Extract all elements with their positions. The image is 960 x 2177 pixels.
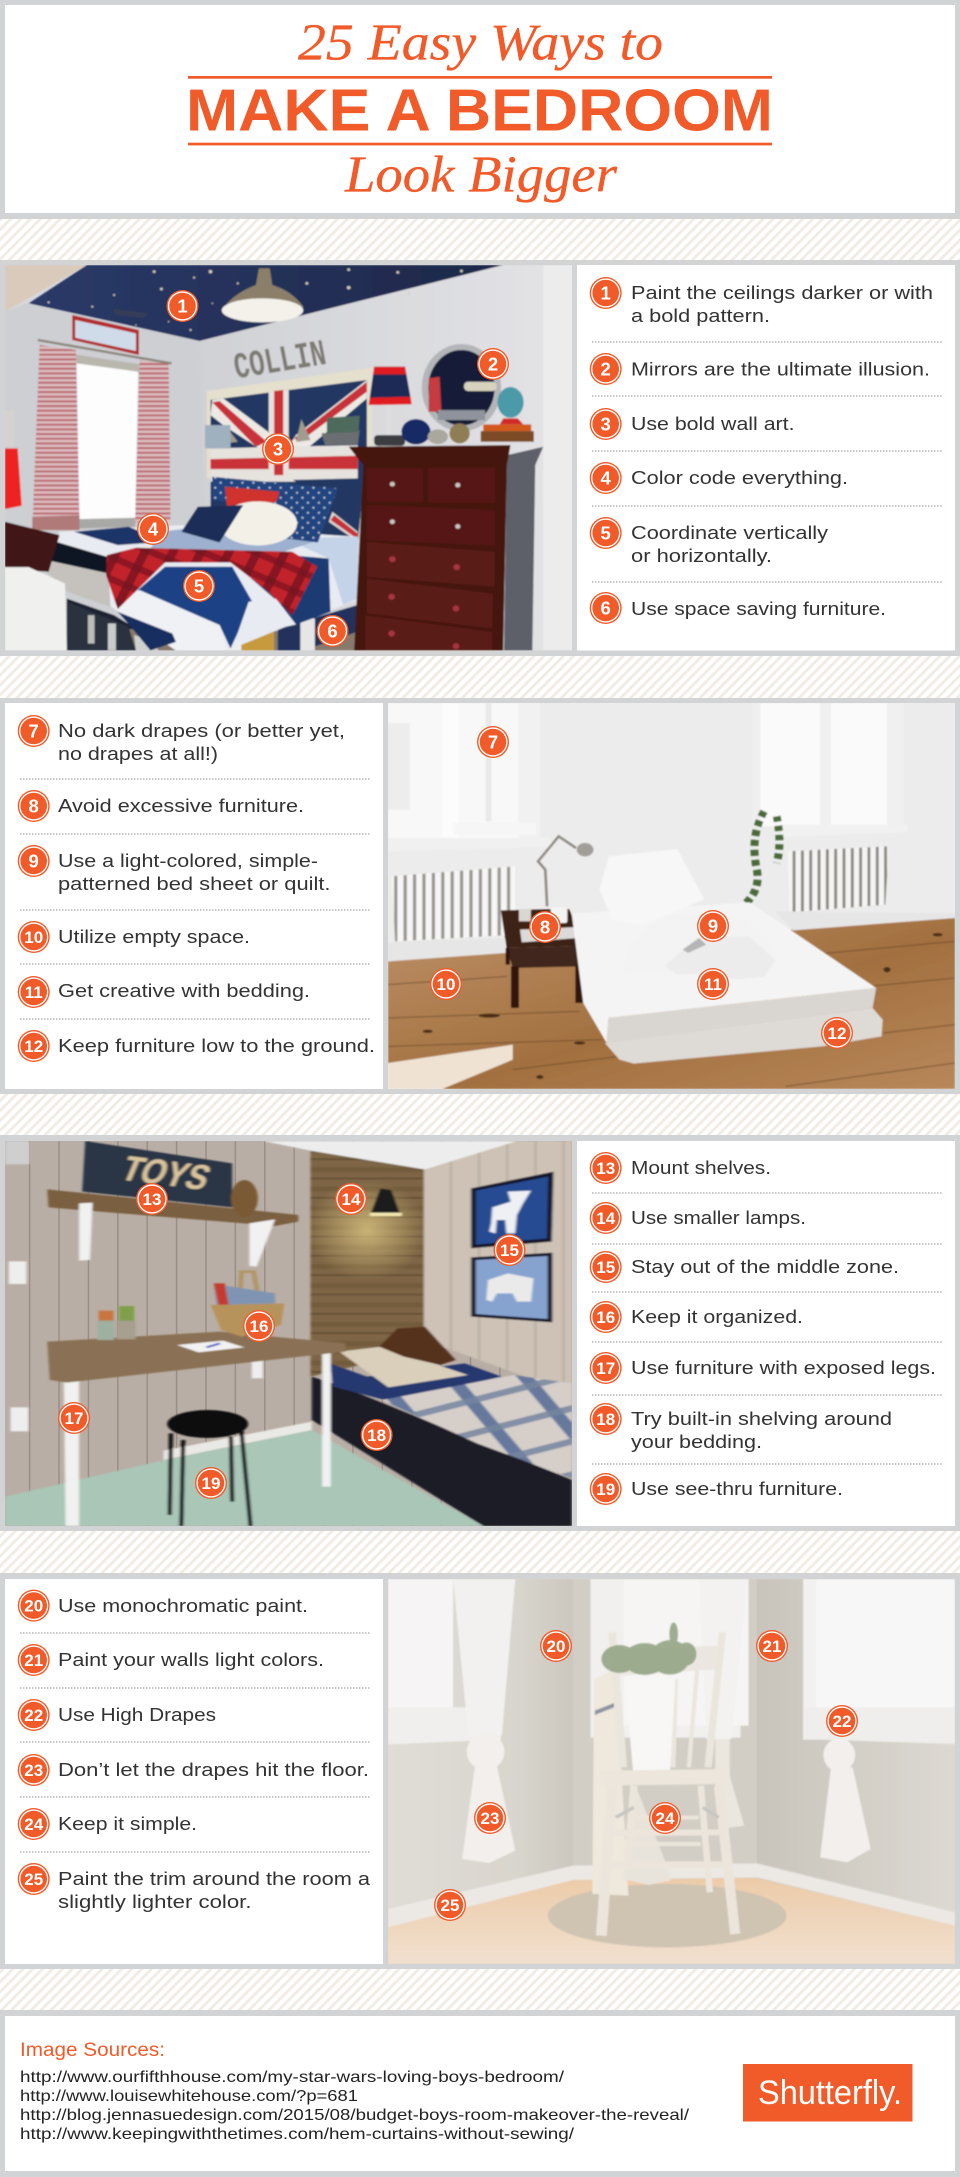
plant (601, 1622, 696, 1675)
panel: title (5, 5, 955, 213)
tip 25 (18, 1863, 371, 1912)
tip 7 (18, 715, 345, 764)
left window (388, 1579, 453, 1708)
photo 3 number markers: 17 (65, 1409, 83, 1428)
tip 18: 18 (596, 1410, 615, 1429)
headboard (207, 368, 372, 478)
tip 14: Use smaller lamps. (631, 1208, 806, 1228)
mattress (605, 1008, 883, 1064)
tip 3: 3 (601, 414, 611, 434)
left window (388, 703, 540, 838)
tip 1 (590, 277, 933, 326)
tip 15: 15 (596, 1258, 615, 1277)
tip 9: Use a light-colored, simple- (58, 851, 318, 871)
tip 24: Keep it simple. (58, 1814, 197, 1834)
tip 20: 20 (24, 1597, 43, 1616)
center window (590, 1579, 741, 1738)
TOYS sign (82, 1141, 232, 1207)
tip 16: Keep it organized. (631, 1307, 803, 1327)
floor (388, 918, 955, 1089)
tip 18: your bedding. (631, 1432, 762, 1452)
photo 3 number markers: 16 (250, 1317, 268, 1336)
striped divider 3 (0, 1094, 960, 1135)
photo 2 number markers: 9 (708, 916, 718, 936)
photo 4 number markers: 21 (763, 1637, 781, 1656)
tip 24: 24 (24, 1815, 44, 1834)
tip 19 (590, 1473, 843, 1505)
desk lamp (538, 836, 576, 906)
cloth behind chair (592, 1669, 628, 1896)
tip 21 (18, 1644, 324, 1676)
tip 20: Use monochromatic paint. (58, 1596, 308, 1616)
photo 2 number markers: 7 (488, 732, 498, 752)
globe books (497, 387, 524, 418)
curtains (32, 345, 80, 530)
mirror (425, 347, 498, 428)
plant (746, 811, 764, 903)
panel: photo 2 white minimalist bedroom (388, 703, 955, 1089)
tip 11 (18, 976, 310, 1008)
right window (753, 703, 903, 826)
tip 25: Paint the trim around the room a (58, 1869, 371, 1889)
photo 2 number markers (430, 726, 853, 1049)
tip 1: a bold pattern. (631, 306, 770, 326)
dresser (504, 447, 543, 650)
shelf (47, 1189, 298, 1226)
table (501, 909, 587, 948)
striped divider 4 (0, 1531, 960, 1573)
photo 1 number markers (137, 290, 509, 647)
panel: photo 1 kids bedroom with union jack (5, 265, 572, 650)
striped divider 2 (0, 656, 960, 698)
tip 3: Use bold wall art. (631, 414, 794, 434)
wall lamp (370, 1188, 401, 1215)
left furniture (5, 522, 60, 572)
title line: MAKE A BEDROOM: MAKE A BEDROOM (186, 78, 773, 144)
tip 14 (590, 1202, 806, 1234)
COLLIN letters: COLLIN (231, 333, 330, 390)
striped divider 5 (0, 1969, 960, 2010)
tip 6: Use space saving furniture. (631, 599, 886, 619)
title line: 25 Easy Ways to: 25 Easy Ways to (298, 14, 663, 71)
tip 14: 14 (596, 1209, 616, 1228)
tip 23: 23 (24, 1761, 43, 1780)
tip 19: 19 (596, 1480, 615, 1499)
desk (64, 1378, 79, 1526)
photo 3 number markers: 14 (342, 1190, 361, 1209)
stool (170, 1430, 251, 1526)
tip 5 (590, 517, 828, 566)
tip 5: Coordinate vertically (631, 523, 828, 543)
tip 17: 17 (596, 1359, 615, 1378)
wood wall (311, 1151, 424, 1377)
table lamp (387, 402, 392, 438)
photo 2 number markers: 8 (540, 916, 550, 938)
tip 6: 6 (601, 598, 611, 618)
photo 2 number markers: 10 (437, 975, 455, 994)
seat (600, 1769, 730, 1786)
tip 13: 13 (596, 1159, 615, 1178)
bed (312, 1377, 572, 1526)
bed (47, 525, 358, 650)
tip 15 (590, 1251, 899, 1283)
tip 10: 10 (24, 928, 43, 947)
tip 2: 2 (601, 358, 611, 380)
duvet (623, 913, 778, 980)
tip 18 (590, 1403, 892, 1452)
bed base below (67, 598, 172, 650)
tip 8 (18, 790, 304, 822)
photo 4 number markers: 23 (481, 1809, 499, 1828)
panel: photo 4 white chair in corner (388, 1579, 955, 1964)
tip 2: Mirrors are the ultimate illusion. (631, 360, 930, 380)
switches (9, 1261, 26, 1284)
photo 3 number markers: 13 (143, 1190, 161, 1209)
panel: tips list 3 (577, 1141, 955, 1526)
logo: Shutterfly (743, 2064, 912, 2122)
tip 12 (18, 1030, 375, 1062)
tip 8: 8 (29, 796, 39, 816)
photo 2 number markers: 12 (828, 1024, 846, 1043)
tip 16: 16 (596, 1308, 615, 1327)
tip 6 (590, 592, 886, 624)
source links: http://www.keepingwiththetimes.com/hem-curtains-without-sewing/ (20, 2126, 575, 2143)
chair back (616, 1646, 721, 1676)
photo 4 number markers: 25 (441, 1896, 459, 1915)
panel: photo 3 desk and bed nook: TOYS (116, 1148, 217, 1197)
photo 3 number markers (58, 1183, 526, 1499)
tip 1: 1 (601, 282, 611, 304)
tip 7: 7 (29, 720, 39, 742)
curtain tie right (820, 1738, 871, 1862)
tip 12: 12 (24, 1037, 43, 1056)
tip 21: Paint your walls light colors. (58, 1650, 324, 1670)
carpet (5, 1430, 483, 1526)
tip 11: 11 (25, 983, 43, 1002)
panel: photo 3 desk and bed nook (5, 1141, 572, 1526)
tip 10: Utilize empty space. (58, 927, 250, 947)
photo 3 number markers: 19 (202, 1474, 220, 1493)
sign (72, 315, 139, 355)
photo 1 number markers: 3 (273, 438, 283, 460)
tip 15: Stay out of the middle zone. (631, 1257, 899, 1277)
tip 23 (18, 1754, 369, 1786)
baseboard (388, 1863, 955, 1927)
source links: http://blog.jennasuedesign.com/2015/08/budget-boys-room-makeover-the-reveal/ (20, 2107, 690, 2124)
tip 2 (590, 353, 930, 385)
source links: http://www.louisewhitehouse.com/?p=681 (20, 2088, 358, 2105)
title line: Look Bigger: Look Bigger (344, 147, 618, 204)
tip 7: No dark drapes (or better yet, (58, 721, 345, 741)
tip 19: Use see-thru furniture. (631, 1479, 843, 1499)
tip 21: 21 (24, 1651, 43, 1670)
tip 5: or horizontally. (631, 546, 772, 566)
tip 7: no drapes at all!) (58, 744, 218, 764)
photo 1 number markers: 5 (194, 576, 204, 596)
panel: tips list 1 (577, 265, 955, 650)
photo 3 number markers: 18 (367, 1426, 386, 1445)
tip 4: 4 (601, 468, 612, 488)
photo 4 number markers: 24 (656, 1809, 675, 1828)
tip 23: Don’t let the drapes hit the floor. (58, 1760, 369, 1780)
tip 16 (590, 1301, 803, 1333)
logo: Shutterfly: Shutterfly. (758, 2074, 902, 2112)
photo 4 number markers: 22 (833, 1712, 851, 1731)
tip 20 (18, 1590, 308, 1622)
shelf items (321, 430, 360, 445)
tip 11: Get creative with bedding. (58, 981, 310, 1001)
photo 4 number markers (434, 1630, 858, 1921)
tip 3 (590, 408, 794, 440)
tip 17: Use furniture with exposed legs. (631, 1358, 936, 1378)
tip 13 (590, 1152, 771, 1184)
tip 1: Paint the ceilings darker or with (631, 283, 933, 303)
photo 3 number markers: 15 (500, 1241, 519, 1260)
right window (803, 1579, 955, 1740)
legs and rungs (601, 1786, 735, 1936)
tip 4: Color code everything. (631, 468, 848, 488)
tip 17 (590, 1352, 936, 1384)
basket (240, 1272, 260, 1305)
right wall (424, 1141, 572, 1393)
tip 10 (18, 921, 250, 953)
tip 9: patterned bed sheet or quilt. (58, 874, 330, 894)
panel: footer sources (5, 2016, 955, 2171)
radiators (392, 866, 516, 941)
title rule bottom (188, 143, 772, 145)
panel: tips list 4 (5, 1579, 383, 1964)
lamp (226, 268, 304, 308)
photo 1 number markers: 2 (488, 354, 498, 374)
left edge items (5, 448, 22, 509)
tip 18: Try built-in shelving around (631, 1409, 892, 1429)
rug (548, 1884, 786, 1947)
tip 9: 9 (29, 850, 39, 872)
curtain tie left (462, 1733, 515, 1863)
frames (471, 1172, 554, 1248)
tip 4 (590, 462, 848, 494)
tip 13: Mount shelves. (631, 1158, 771, 1178)
photo 2 number markers: 11 (704, 975, 722, 994)
walls (388, 1579, 573, 1912)
tip 22 (18, 1699, 216, 1731)
tip 25: slightly lighter color. (58, 1892, 252, 1912)
tip 22: Use High Drapes (58, 1705, 216, 1725)
photo 1 number markers: 4 (148, 518, 159, 540)
title rule top (188, 76, 772, 79)
tip 24 (18, 1808, 197, 1840)
striped divider 1 (0, 219, 960, 260)
photo 4 number markers: 20 (547, 1637, 565, 1656)
heading: Image Sources: Image Sources: (20, 2040, 165, 2061)
photo 1 number markers: 6 (327, 620, 338, 642)
panel: tips list 2 (5, 703, 383, 1089)
source links (20, 2069, 690, 2143)
pillows (212, 477, 338, 542)
source links: http://www.ourfifthhouse.com/my-star-wars-loving-boys-bedroom/ (20, 2069, 565, 2086)
tip 25: 25 (24, 1870, 43, 1889)
photo 1 number markers: 1 (177, 296, 188, 316)
tip 22: 22 (24, 1706, 43, 1725)
tip 5: 5 (601, 522, 611, 544)
tip 9 (18, 845, 330, 894)
vase (625, 1677, 675, 1772)
tip 12: Keep furniture low to the ground. (58, 1036, 375, 1056)
window (74, 354, 140, 373)
pillow (600, 849, 704, 925)
tip 8: Avoid excessive furniture. (58, 796, 304, 816)
plaid throw (106, 548, 317, 615)
floor (388, 1878, 955, 1964)
pens (97, 1320, 114, 1340)
ceiling (263, 1141, 517, 1169)
